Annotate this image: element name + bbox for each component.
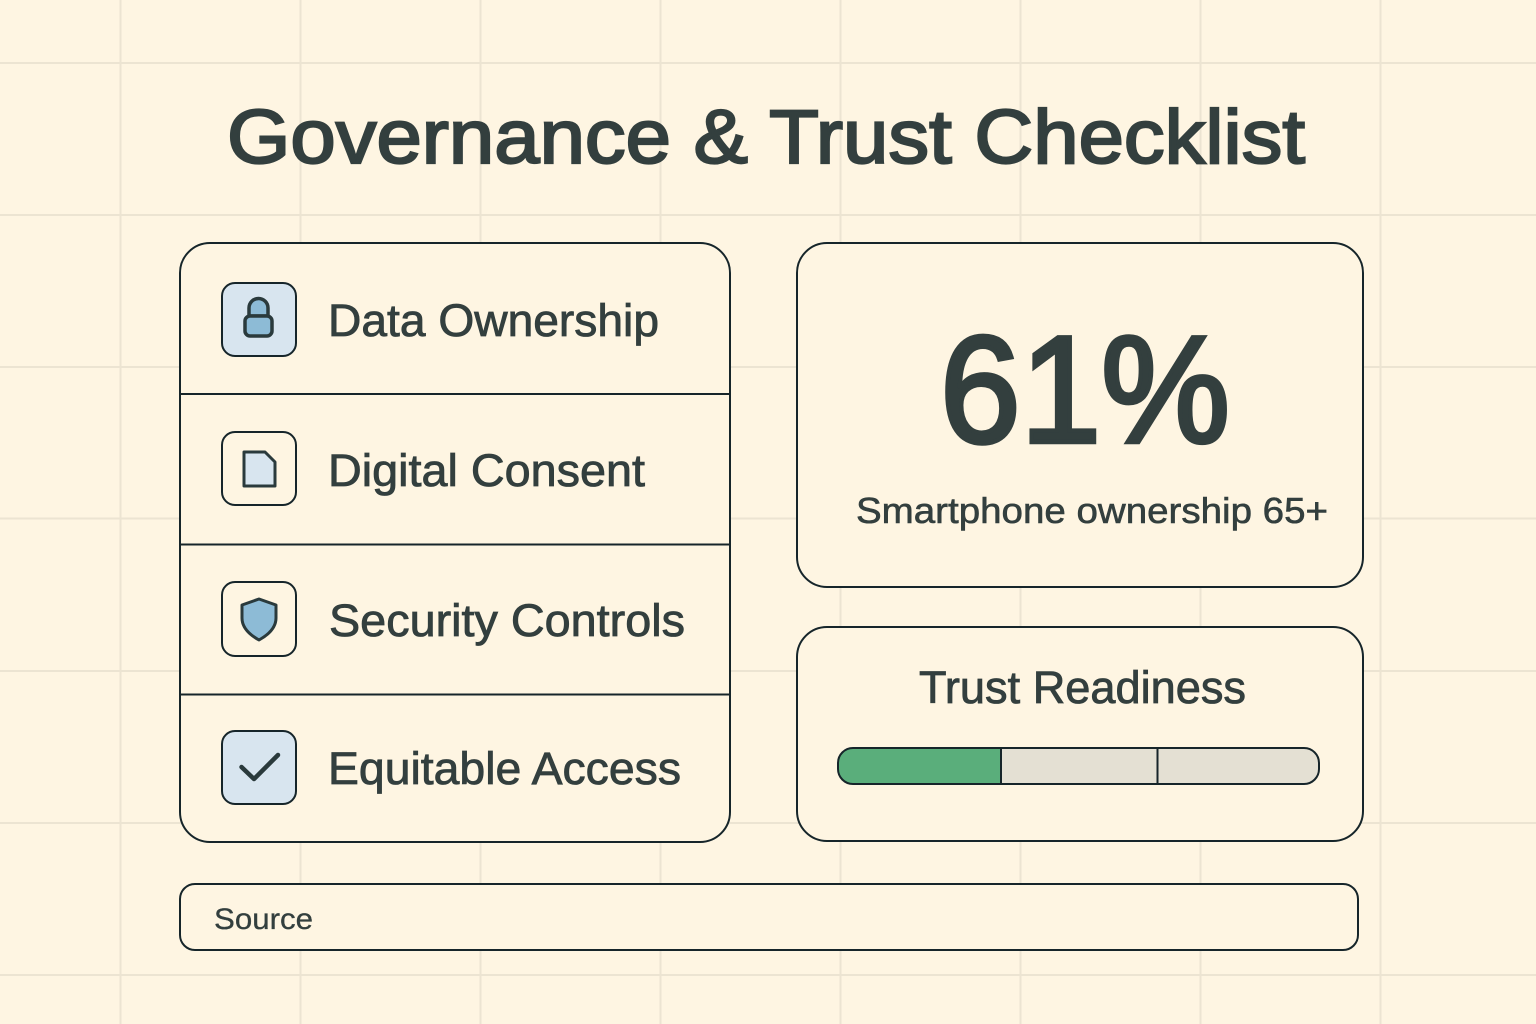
panel: source [180, 884, 1358, 950]
checklist item: data ownership [222, 283, 659, 356]
progress bar [838, 748, 1319, 784]
checklist item: security controls [222, 582, 685, 656]
statistic caption: Smartphone ownership 65+ [856, 490, 1328, 531]
panel: trust readiness [797, 627, 1363, 841]
panel: statistic [797, 243, 1363, 587]
label: security controls: Security Controls [329, 595, 685, 646]
title: Governance & Trust Checklist [227, 95, 1305, 180]
checklist item: digital consent [222, 432, 646, 505]
label: data ownership: Data Ownership [328, 295, 659, 346]
checklist item: equitable access [222, 731, 681, 804]
icon: checkmark [222, 731, 296, 804]
source label: Source [214, 903, 313, 936]
label: digital consent: Digital Consent [328, 445, 646, 496]
panel: checklist [180, 243, 730, 842]
icon: padlock [222, 283, 296, 356]
icon: document [222, 432, 296, 505]
label: equitable access: Equitable Access [328, 743, 681, 794]
big number: 61% [940, 305, 1230, 475]
icon: shield [222, 582, 296, 656]
heading: trust readiness: Trust Readiness [919, 662, 1246, 713]
